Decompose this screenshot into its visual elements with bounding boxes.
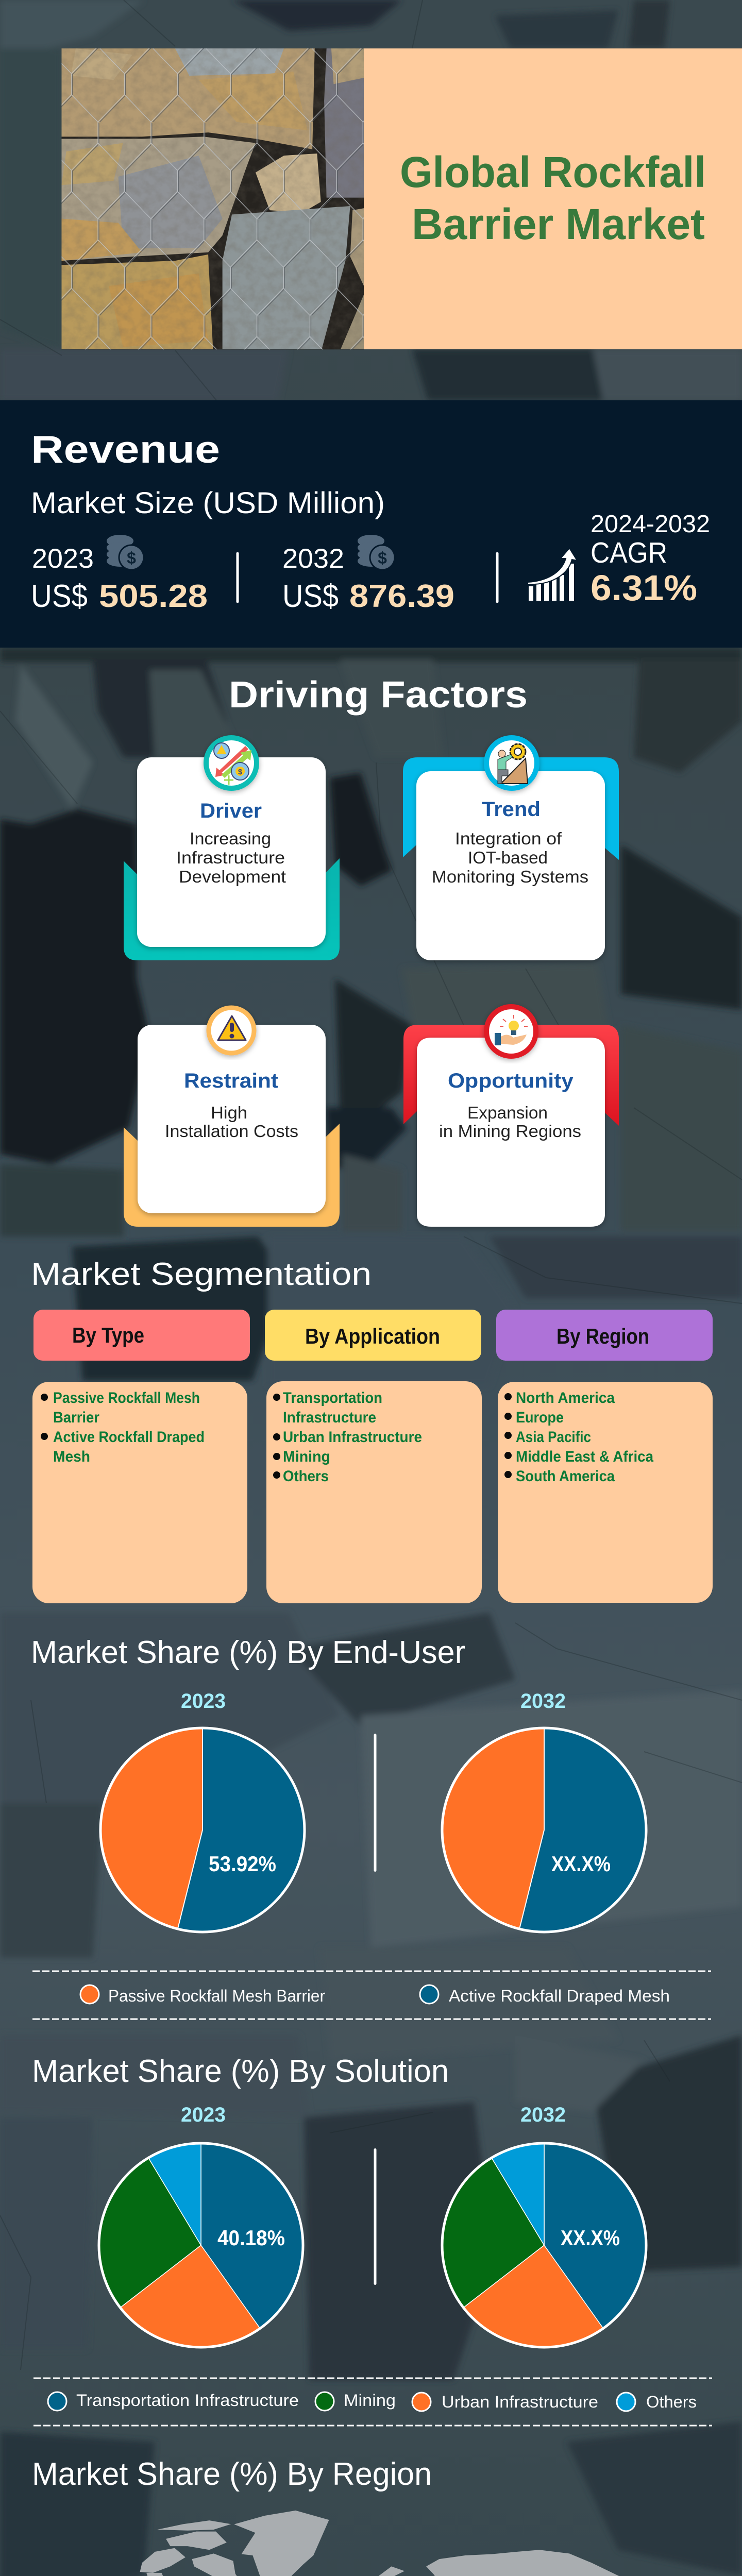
panel: region list: Europe <box>516 1409 564 1426</box>
panel: type list: Mesh <box>53 1448 90 1465</box>
stat: 2023 revenue: US$ <box>31 579 88 614</box>
tab: by application: By Application <box>305 1324 440 1348</box>
chart: solution pie 2023 <box>99 2104 303 2347</box>
panel: region list: Asia Pacific <box>516 1429 591 1446</box>
tab: by region <box>496 1310 713 1361</box>
panel: application list: Mining <box>283 1448 330 1465</box>
text: driver: Development <box>179 867 286 886</box>
panel: application list: Others <box>283 1468 329 1485</box>
tab: by application <box>265 1310 481 1361</box>
icon: restraint badge <box>209 1008 254 1053</box>
panel: region list: North America <box>516 1389 615 1406</box>
panel: region list <box>498 1382 713 1603</box>
divider <box>374 2148 376 2285</box>
text: trend: Monitoring Systems <box>432 867 588 886</box>
icon: coins 2023 <box>107 535 144 570</box>
chart: solution pie 2023: 2023 <box>181 2104 226 2126</box>
text: market size: Market Size (USD Million) <box>31 486 385 520</box>
panel: application list: Urban Infrastructure <box>283 1429 422 1446</box>
legend: end-user <box>32 1971 711 2019</box>
text: trend: Trend <box>482 798 541 821</box>
hero photo: rocks behind wire mesh <box>61 48 364 349</box>
legend: solution: Mining <box>344 2391 396 2410</box>
chart: end-user pie 2023: 53.92% <box>209 1852 276 1876</box>
tab: by type <box>33 1310 250 1361</box>
panel: region list: Middle East & Africa <box>516 1448 653 1465</box>
chart: solution pie 2032 <box>442 2104 646 2347</box>
heading: market segmentation: Market Segmentation <box>31 1257 372 1292</box>
stat: 2032 revenue: 2032 <box>282 544 344 574</box>
icon: coins 2032 <box>358 535 395 570</box>
panel: type list: Active Rockfall Draped <box>53 1429 205 1446</box>
stat: CAGR: 6.31% <box>591 568 697 608</box>
chart: end-user pie 2023 <box>100 1690 305 1932</box>
icon: driver badge: $ <box>238 768 243 776</box>
stat: 2032 revenue: 876.39 <box>349 579 454 614</box>
text: restraint: High <box>211 1103 247 1122</box>
chart: solution pie 2023: 40.18% <box>217 2226 285 2250</box>
heading: market share by end-user: Market Share (%) By End-User <box>31 1635 465 1670</box>
chart: end-user pie 2032: XX.X% <box>551 1852 611 1876</box>
divider <box>236 552 239 603</box>
chart: end-user pie 2032 <box>442 1690 646 1932</box>
heading: revenue: Revenue <box>31 428 220 471</box>
stat: 2023 revenue <box>31 544 208 614</box>
panel: type list <box>32 1382 247 1603</box>
legend: end-user: Active Rockfall Draped Mesh <box>449 1987 670 2005</box>
panel: application list: Transportation <box>283 1389 382 1406</box>
text: driver <box>176 800 286 886</box>
title: Global Rockfall <box>400 148 706 196</box>
legend: solution <box>33 2378 712 2426</box>
panel: region list: South America <box>516 1468 615 1485</box>
icon: trend badge <box>486 738 537 788</box>
stat: CAGR <box>591 511 710 608</box>
heading: market share by region: Market Share (%) By Region <box>32 2456 432 2492</box>
text: restraint: Installation Costs <box>165 1122 298 1141</box>
title panel <box>364 48 742 349</box>
card: trend <box>403 738 619 960</box>
legend: solution: Others <box>646 2393 697 2411</box>
text: driver: Increasing <box>190 829 271 848</box>
heading: driving factors: Driving Factors <box>229 674 528 716</box>
icon: growth chart <box>528 548 577 601</box>
text: restraint <box>165 1070 298 1141</box>
world map <box>71 2511 667 2576</box>
divider <box>496 552 499 603</box>
chart: end-user pie 2032: 2032 <box>520 1690 566 1713</box>
text: trend: Integration of <box>455 829 562 848</box>
text: driver: Infrastructure <box>176 848 285 867</box>
panel: type list: Passive Rockfall Mesh <box>53 1389 200 1406</box>
title: Barrier Market <box>412 200 705 248</box>
icon: driver badge <box>206 738 257 788</box>
stat: CAGR: CAGR <box>591 536 667 569</box>
stat: 2023 revenue: 505.28 <box>99 579 208 614</box>
icon: coins 2032: $ <box>378 549 387 567</box>
stat: CAGR: 2024-2032 <box>591 511 710 538</box>
icon: coins 2023: $ <box>127 549 136 567</box>
legend: solution: Urban Infrastructure <box>442 2393 598 2411</box>
card: opportunity <box>403 1007 619 1227</box>
panel: revenue <box>0 400 742 648</box>
chart: solution pie 2032: XX.X% <box>561 2226 620 2250</box>
stat: 2032 revenue: US$ <box>282 579 339 614</box>
stat: 2032 revenue <box>282 544 454 614</box>
chart: solution pie 2032: 2032 <box>520 2104 566 2126</box>
panel: application list: Infrastructure <box>283 1409 376 1426</box>
icon: opportunity badge <box>486 1007 536 1056</box>
card: driver <box>124 738 340 960</box>
text: restraint: Restraint <box>184 1070 278 1092</box>
text: opportunity: in Mining Regions <box>439 1122 581 1141</box>
chart: end-user pie 2023: 2023 <box>181 1690 226 1713</box>
text: opportunity: Opportunity <box>448 1070 574 1092</box>
stat: 2023 revenue: 2023 <box>32 544 94 574</box>
text: trend: IOT-based <box>468 848 548 867</box>
text: opportunity <box>439 1070 581 1141</box>
title <box>400 148 706 248</box>
tab: by type: By Type <box>72 1323 144 1347</box>
divider <box>374 1734 376 1872</box>
legend: end-user: Passive Rockfall Mesh Barrier <box>108 1987 325 2005</box>
tab: by region: By Region <box>556 1324 649 1348</box>
text: driver: Driver <box>200 800 262 822</box>
panel: type list: Barrier <box>53 1409 99 1426</box>
panel: application list <box>266 1381 482 1603</box>
card: restraint <box>124 1008 340 1227</box>
text: trend <box>432 798 588 886</box>
text: opportunity: Expansion <box>467 1103 548 1122</box>
heading: market share by solution: Market Share (%) By Solution <box>32 2054 449 2089</box>
legend: solution: Transportation Infrastructure <box>76 2391 299 2410</box>
